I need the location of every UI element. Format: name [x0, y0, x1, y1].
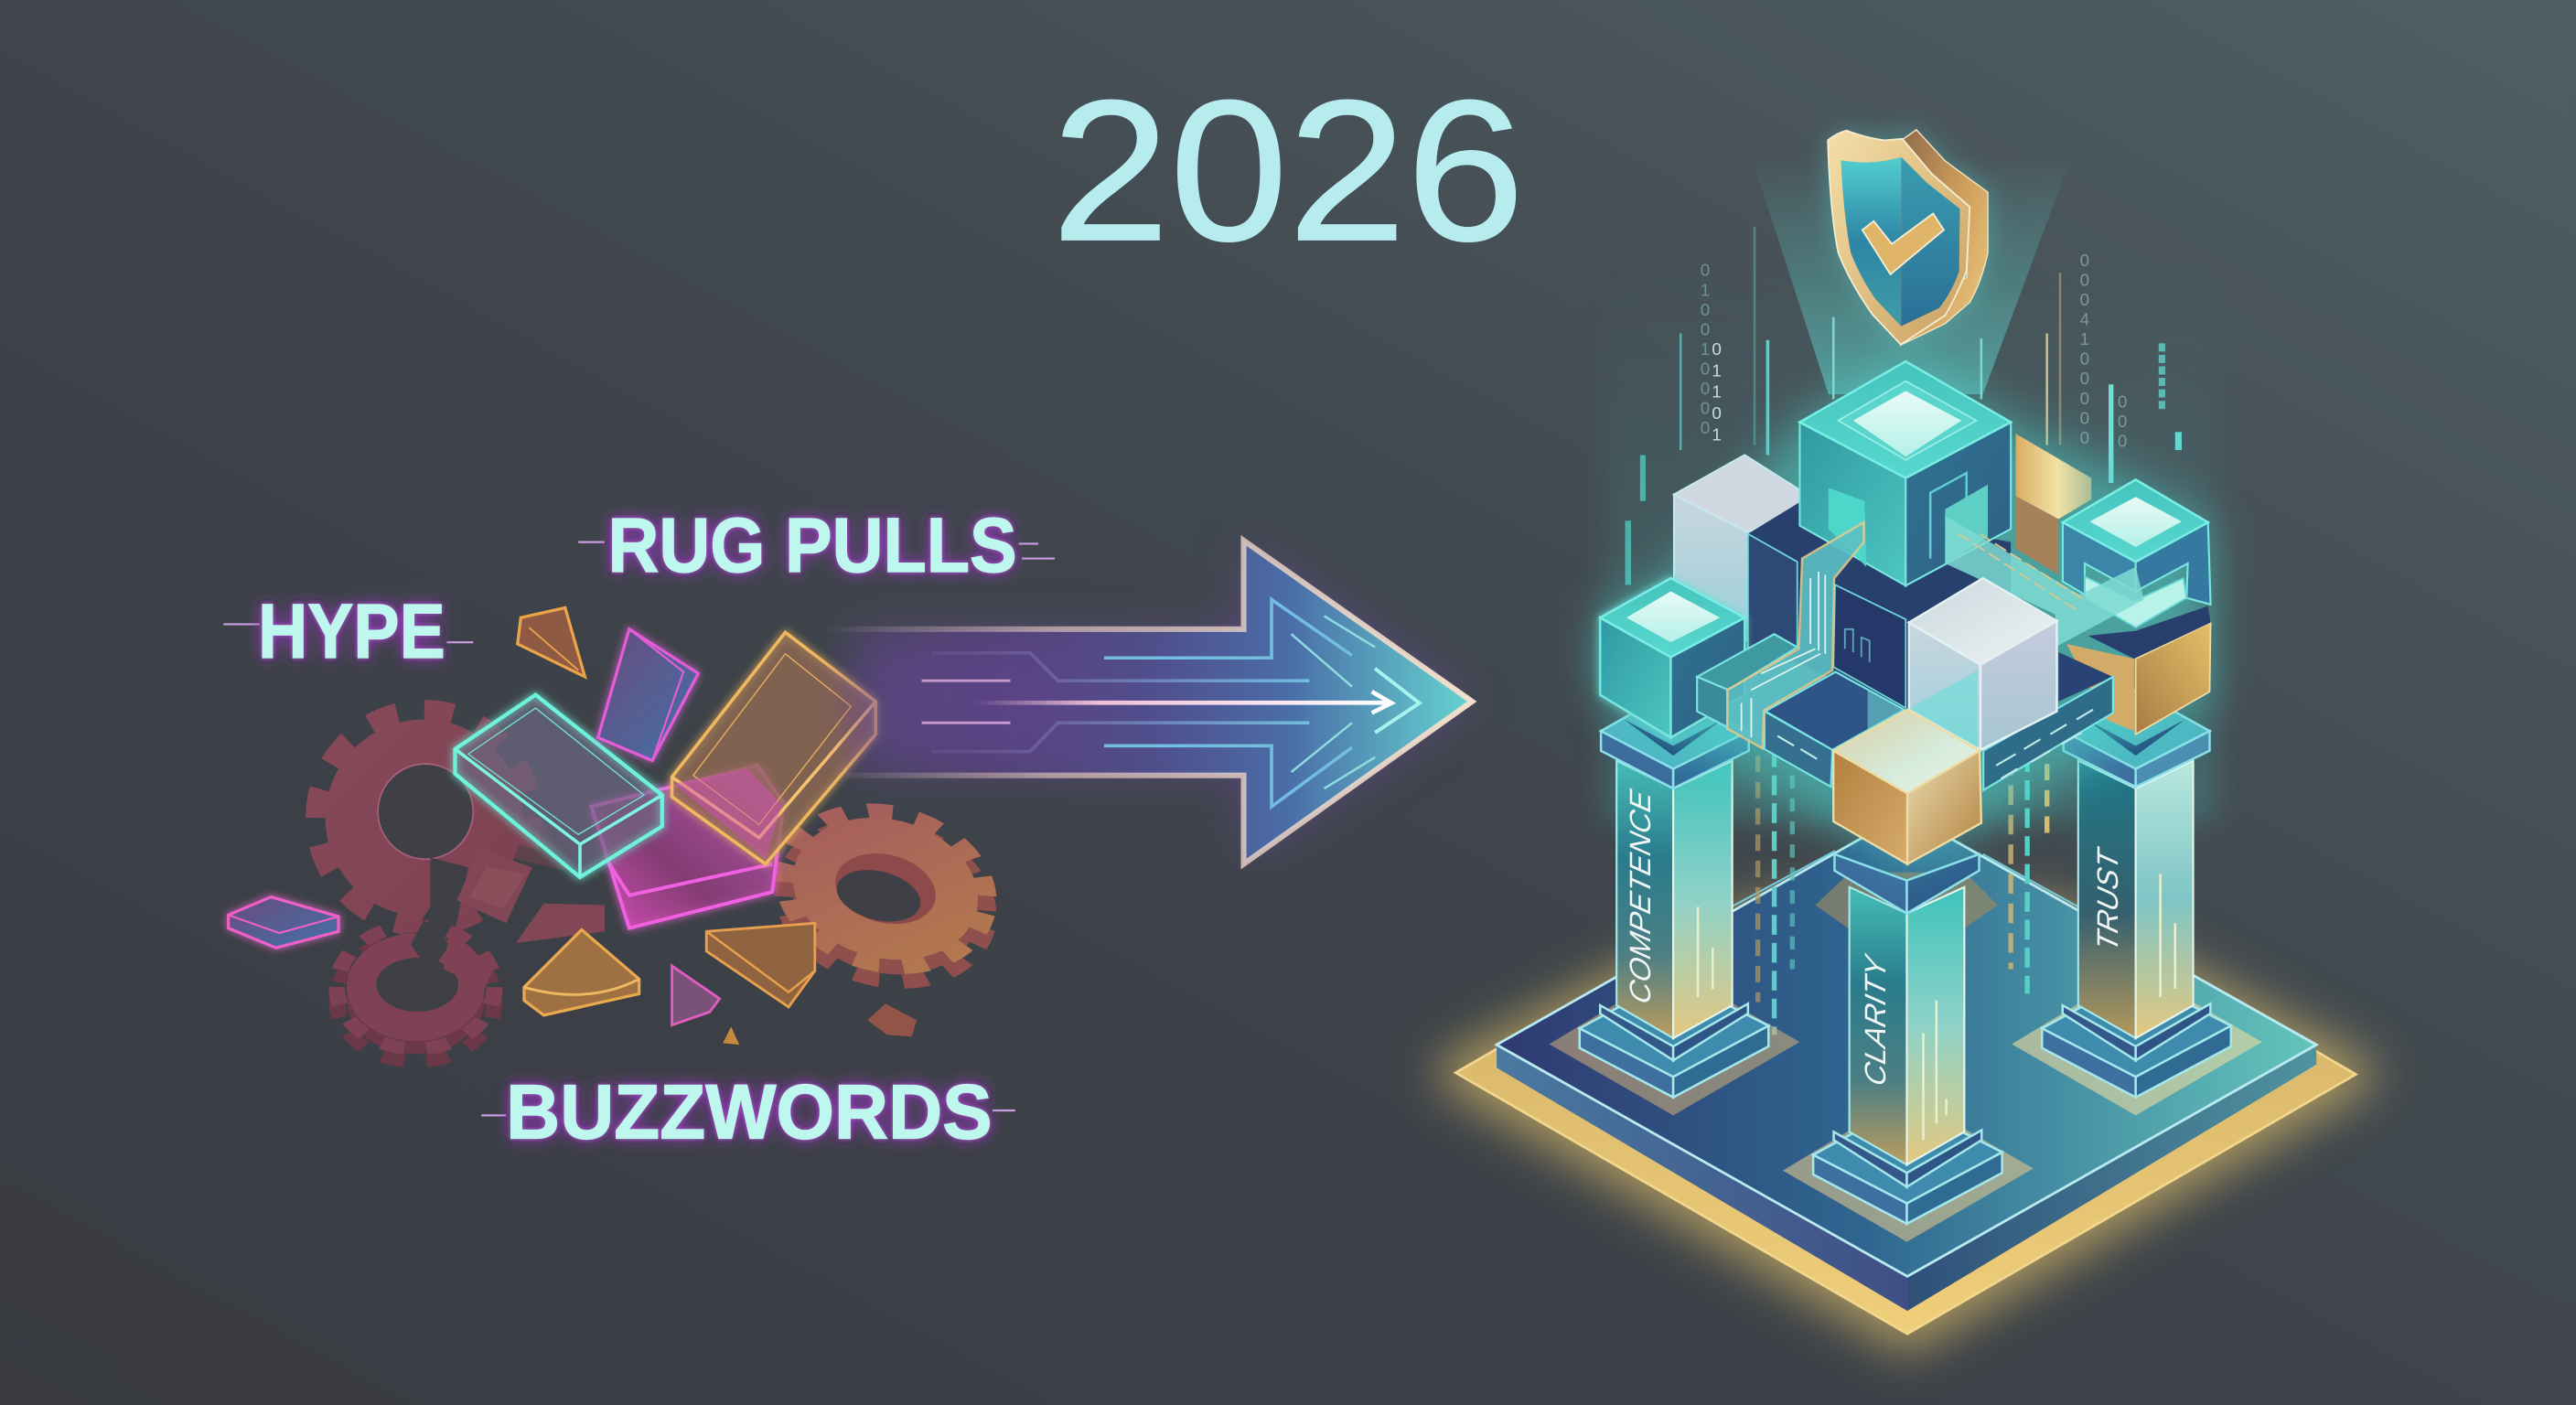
binary digits left: 0 — [1701, 359, 1710, 378]
binary digits right: 0 — [2080, 408, 2089, 427]
pillar capital — [1834, 854, 1980, 913]
pillar foot — [1813, 1104, 2002, 1224]
icon: small chip — [867, 1003, 917, 1036]
binary digits far right: 0 — [2118, 391, 2127, 411]
deck band — [1697, 634, 2113, 790]
label: RUG PULLS: RUG PULLS — [608, 502, 1017, 588]
pillar foot — [1580, 978, 1768, 1098]
pillar shaft — [1850, 887, 1907, 1164]
binary digits left: 0 — [1701, 319, 1710, 338]
panel: trust tower — [1455, 130, 2356, 1334]
arrow body — [821, 541, 1472, 864]
data streams under deck — [1758, 747, 2047, 1035]
shield face right — [1901, 157, 1960, 327]
binary digits left: 1 — [1701, 280, 1710, 299]
navy core — [1748, 503, 2011, 710]
pillar capital — [1601, 690, 1749, 788]
background haze — [1602, 263, 2217, 821]
binary digits centre-left: 1 — [1712, 360, 1722, 380]
cube: gold front block — [1833, 710, 1981, 864]
pillar pad — [2012, 970, 2262, 1115]
arrow: transition to 2026 — [821, 541, 1472, 864]
binary digits centre-left: 0 — [1712, 339, 1722, 359]
binary digits right: 0 — [2080, 389, 2089, 408]
pillar label: CLARITY: CLARITY — [1859, 950, 1892, 1089]
binary digits centre-left: 0 — [1712, 403, 1722, 423]
shield glow — [1829, 130, 1988, 345]
binary digits right: 0 — [2080, 270, 2089, 289]
pillar shaft — [1616, 760, 1673, 1038]
binary digits centre-left: 1 — [1712, 424, 1722, 444]
icon: teal glass box — [455, 695, 662, 877]
pillar: Competence — [1550, 690, 1799, 1115]
binary digits centre-left: 1 — [1712, 382, 1722, 402]
cube: main top block — [1799, 361, 2011, 585]
shield side — [1901, 130, 1988, 345]
binary digits right: 0 — [2080, 349, 2089, 369]
pillar label: COMPETENCE: COMPETENCE — [1623, 786, 1657, 1007]
binary digits left: 0 — [1701, 300, 1710, 319]
shield face left — [1841, 157, 1901, 327]
base glow — [1455, 920, 2356, 1334]
binary digits left: 0 — [1701, 399, 1710, 418]
inner arrow outline — [922, 599, 1420, 807]
binary digits left: 1 — [1701, 339, 1710, 359]
binary digits right: 4 — [2080, 310, 2089, 329]
pillar: Trust — [2012, 690, 2262, 1115]
binary digits right: 0 — [2080, 428, 2089, 447]
binary digits far right: 0 — [2118, 412, 2127, 431]
shield rim — [1828, 131, 1970, 345]
icon: small broken gear — [337, 920, 495, 1062]
arrow outline — [825, 541, 1472, 864]
cube: left teal block — [1600, 578, 1744, 737]
binary digits right: 0 — [2080, 290, 2089, 309]
icon: tiny chip — [723, 1026, 739, 1045]
binary digits left: 0 — [1701, 418, 1710, 437]
cube: gold right block — [2066, 606, 2211, 735]
cube: frosted front block — [1868, 578, 2056, 750]
binary digits right: 0 — [2080, 251, 2089, 270]
title: 2026: 2026 — [1051, 59, 1525, 283]
gold base plate — [1455, 813, 2356, 1334]
panel: broken hype rubble — [223, 502, 1055, 1155]
icon: orange shard — [518, 607, 585, 677]
binary digits right: 1 — [2080, 329, 2089, 349]
icon: large broken gear — [320, 714, 567, 986]
tower glow — [1600, 361, 2208, 864]
icon: orange wedge — [524, 929, 639, 1015]
cube: frosted back block — [1674, 455, 1817, 640]
circuit strip: left — [1727, 522, 1863, 748]
light beam — [1751, 156, 2072, 394]
pillar pad — [1783, 1096, 2034, 1242]
icon: shield with checkmark — [1828, 130, 1988, 345]
checkmark — [1862, 213, 1944, 274]
circuit strip: right — [1945, 516, 2144, 648]
binary digits right: 0 — [2080, 369, 2089, 388]
icon: large orange gear — [770, 792, 1001, 1000]
pillar: Clarity — [1783, 854, 2034, 1242]
label: HYPE: HYPE — [258, 588, 445, 674]
binary digits far right: 0 — [2118, 431, 2127, 450]
cube: right teal block — [2063, 479, 2211, 627]
binary digits left: 0 — [1701, 261, 1710, 280]
arrow centre line — [974, 692, 1391, 713]
label: BUZZWORDS: BUZZWORDS — [506, 1069, 993, 1155]
pillar pad — [1550, 970, 1799, 1115]
base platform — [1497, 813, 2316, 1311]
icon: pink glass slab — [592, 766, 784, 928]
icon: orange glass slab — [672, 632, 875, 864]
data streams above tower — [1628, 227, 2178, 585]
icon: pink shard — [598, 629, 698, 760]
pillar shaft — [2078, 760, 2136, 1038]
pillar foot — [2042, 978, 2231, 1098]
cube: gold back block — [2016, 434, 2091, 575]
binary digits left: 0 — [1701, 379, 1710, 398]
icon: flat pink tile — [229, 897, 338, 948]
arrow glow — [854, 542, 1472, 861]
icon: gear fragments — [444, 849, 605, 989]
icon: small pink shard — [672, 966, 720, 1025]
pillar label: TRUST: TRUST — [2090, 844, 2124, 954]
pillar capital — [2064, 690, 2209, 787]
icon: orange triangle — [706, 923, 815, 1007]
